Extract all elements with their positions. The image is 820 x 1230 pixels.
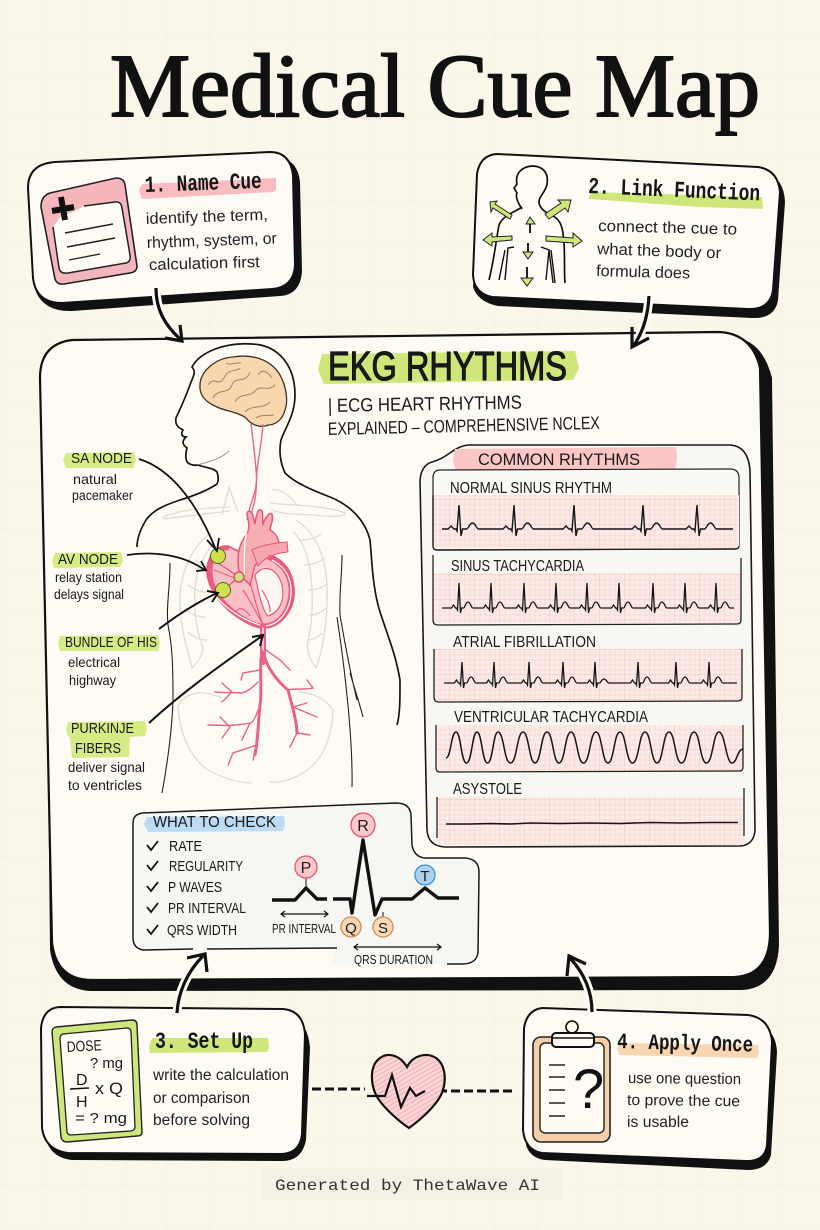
label: Bundle of His: highway [69, 672, 116, 688]
label: Purkinje fibers: to ventricles [68, 777, 142, 793]
icon: heart with pulse [312, 1055, 512, 1128]
text: Apply Once body: is usable [627, 1114, 689, 1131]
label: SA node: SA NODE [71, 450, 132, 467]
label: AV node: delays signal [54, 586, 124, 602]
label: AV node: relay station [55, 569, 122, 585]
chart: PQRST waveform [272, 813, 459, 967]
strip: ventricular tachycardia [436, 709, 743, 772]
icon: dose card: = ? mg [75, 1110, 127, 1127]
outline [137, 344, 400, 725]
icon: clipboard with question [533, 1021, 610, 1142]
icon: dose card: DOSE [66, 1037, 102, 1056]
strip: sinus tachycardia: SINUS TACHYCARDIA [451, 558, 584, 575]
arrow: step 4 to panel [567, 956, 592, 1012]
ribs [162, 487, 345, 783]
icon: dose card: D [76, 1072, 88, 1089]
label: SA node: pacemaker [72, 487, 133, 503]
heading: Name Cue: 1. Name Cue [144, 169, 262, 199]
checklist: REGULARITY [169, 858, 243, 875]
icon: dose card: x Q [95, 1079, 123, 1098]
strip: asystole: ASYSTOLE [453, 781, 522, 798]
label: Purkinje fibers: deliver signal [68, 759, 145, 775]
chart: PQRST waveform: S [378, 920, 388, 937]
strip: normal sinus rhythm [433, 469, 739, 550]
text: Name Cue body: rhythm, system, or [147, 230, 278, 252]
chart: PQRST waveform: R [357, 818, 369, 835]
text: Set Up body: write the calculation [152, 1067, 289, 1084]
label: SA node [63, 450, 136, 503]
checklist: P WAVES [168, 879, 222, 896]
text: Apply Once body: use one question [628, 1070, 741, 1088]
icon: dose card [52, 1020, 142, 1142]
heading: Apply Once: 4. Apply Once [617, 1030, 753, 1059]
checklist: RATE [169, 838, 202, 855]
heading: Link Function: 2. Link Function [588, 174, 761, 207]
footer credit: Generated by ThetaWave AI [275, 1177, 540, 1195]
arrow: step 1 to panel [156, 288, 182, 341]
label: Purkinje fibers [66, 720, 147, 793]
label: Purkinje fibers: FIBERS [75, 740, 121, 757]
panel: main EKG rhythms [40, 332, 779, 991]
subtitle: | ECG HEART RHYTHMS [328, 393, 522, 417]
icon: dose card: ? mg [90, 1055, 123, 1072]
icon: medical chart [41, 178, 137, 284]
icon: heart anatomy [207, 510, 294, 628]
arrow: Purkinje fibers [149, 635, 263, 723]
chart: PQRST waveform: T [420, 868, 430, 885]
text: Link Function body: what the body or [596, 241, 722, 262]
checklist: QRS WIDTH [167, 922, 237, 939]
text: Apply Once body: to prove the cue [627, 1092, 740, 1110]
label: SA node: natural [73, 471, 117, 487]
checklist: PR INTERVAL [168, 900, 246, 917]
chart: PQRST waveform: QRS DURATION [354, 953, 433, 967]
strip: atrial fibrillation [434, 634, 742, 702]
diaphragm [178, 693, 252, 783]
label: Purkinje fibers: PURKINJE [71, 720, 134, 737]
heading: common rhythms [453, 447, 677, 471]
panel: what to check [133, 803, 479, 967]
text: Link Function body: formula does [596, 263, 690, 282]
strip: sinus tachycardia [433, 555, 741, 625]
text: Link Function body [596, 218, 737, 282]
arrow: Bundle of His [159, 591, 218, 629]
text: Set Up body: before solving [153, 1112, 250, 1129]
purkinje fibers [208, 626, 317, 765]
arrow: step 2 to panel [632, 296, 649, 347]
text: Set Up body [152, 1067, 289, 1129]
subtitle: EXPLAINED – COMPREHENSIVE NCLEX [328, 413, 600, 439]
chart: PQRST waveform: PR INTERVAL [272, 922, 336, 936]
chart: PQRST waveform: Q [345, 920, 357, 937]
body outline illustration [137, 344, 400, 793]
icon: clipboard with question: ? [573, 1057, 604, 1120]
strip: normal sinus rhythm: NORMAL SINUS RHYTHM [450, 480, 612, 497]
text: Set Up body: or comparison [153, 1090, 250, 1107]
strip: asystole [437, 781, 744, 845]
text: Link Function body: connect the cue to [598, 218, 737, 239]
heading: what to check: WHAT TO CHECK [153, 814, 277, 831]
panel: step 3 Set Up [41, 1007, 310, 1161]
icon: body with arrows [483, 166, 582, 286]
heading: EKG Rhythms: EKG RHYTHMS [328, 343, 567, 389]
label: Bundle of His [58, 634, 160, 688]
text: Name Cue body: calculation first [149, 254, 261, 274]
arrow: step 3 to panel [177, 954, 207, 1013]
panel: step 1 Name Cue [28, 152, 302, 311]
arrow: AV node [127, 554, 206, 571]
subtitle [328, 393, 600, 439]
spinal cord [247, 424, 263, 520]
title: Medical Cue Map [110, 37, 760, 136]
text: Apply Once body [627, 1070, 741, 1131]
strip: ventricular tachycardia: VENTRICULAR TACHYCARDIA [454, 709, 648, 726]
label: AV node: AV NODE [58, 551, 118, 568]
icon: brain [200, 356, 287, 426]
heading: Set Up: 3. Set Up [155, 1029, 253, 1055]
text: Name Cue body: identify the term, [146, 207, 268, 228]
label: AV node [52, 551, 124, 602]
label: Bundle of His: electrical [68, 654, 120, 670]
heading: common rhythms: COMMON RHYTHMS [478, 450, 640, 469]
chart: PQRST waveform: P [301, 860, 311, 877]
checklist [147, 838, 246, 939]
label: Bundle of His: BUNDLE OF HIS [65, 634, 157, 651]
text: Name Cue body [146, 207, 278, 274]
panel: common rhythms [420, 445, 755, 847]
panel: step 2 Link Function [473, 154, 785, 318]
strip: atrial fibrillation: ATRIAL FIBRILLATION [453, 634, 596, 651]
arrow: SA node [139, 459, 219, 551]
icon: dose card: H [76, 1094, 88, 1111]
footer credit [262, 1168, 562, 1200]
panel: step 4 Apply Once [523, 1008, 777, 1170]
